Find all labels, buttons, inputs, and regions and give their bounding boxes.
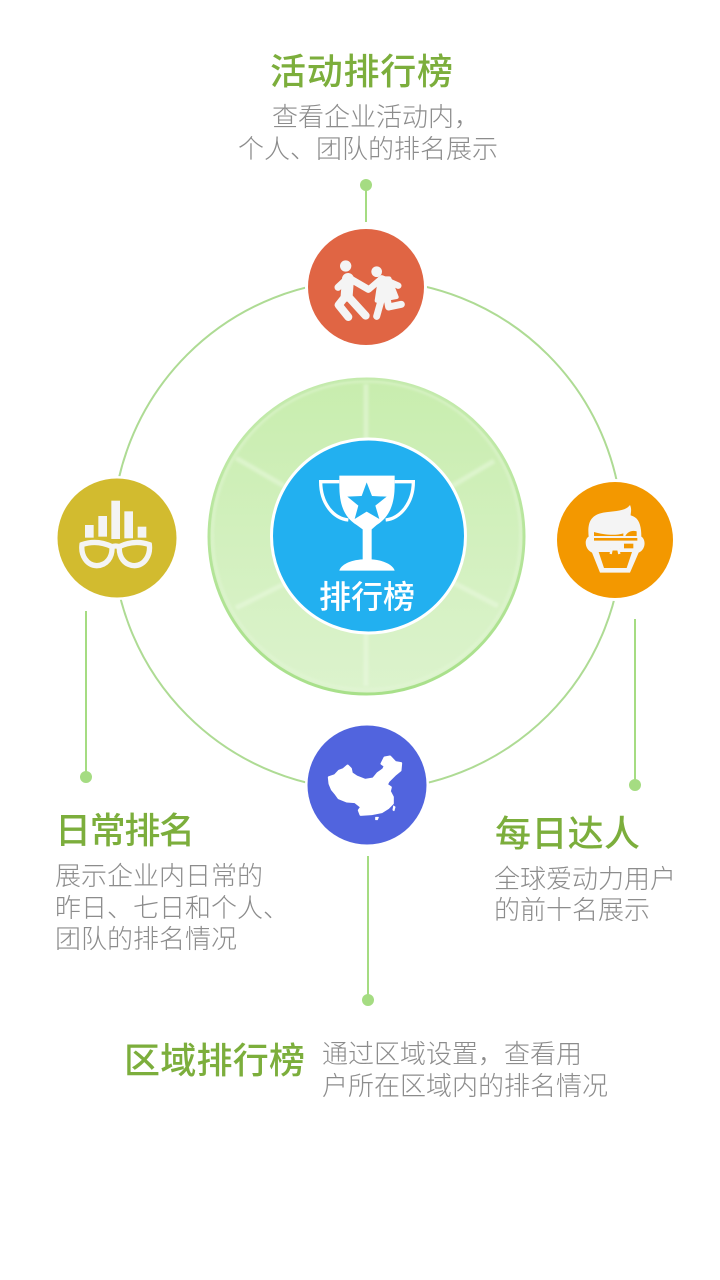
connector: right — [629, 619, 641, 791]
section: daily champion: 每日达人 — [495, 813, 640, 854]
section: daily ranking: 团队的排名情况 — [55, 924, 237, 954]
section: activity ranking: 个人、团队的排名展示 — [238, 134, 498, 164]
section: daily ranking: 昨日、七日和个人、 — [55, 893, 289, 923]
icon: trophy — [321, 476, 413, 571]
icon circle: daily champion — [554, 479, 676, 601]
badge label: 排行榜 — [319, 579, 415, 615]
icon circle: daily ranking — [55, 476, 179, 600]
section: daily ranking: 展示企业内日常的 — [55, 861, 263, 891]
section: regional ranking — [124, 1039, 608, 1101]
section: daily champion — [494, 813, 676, 925]
outer ring — [112, 280, 622, 790]
section: daily champion: 全球爱动力用户 — [494, 864, 676, 894]
section: regional ranking: 区域排行榜 — [124, 1040, 305, 1081]
section: regional ranking: 户所在区域内的排名情况 — [322, 1071, 608, 1101]
section: daily ranking: 日常排名 — [55, 810, 195, 851]
section: activity ranking — [238, 51, 498, 164]
icon circle: regional ranking — [305, 723, 429, 847]
central green disc — [209, 379, 524, 694]
section: daily champion: 的前十名展示 — [494, 895, 650, 925]
central blue badge — [272, 439, 466, 633]
connector: bottom — [362, 856, 374, 1006]
connector: left — [80, 611, 92, 783]
section: activity ranking: 活动排行榜 — [270, 51, 453, 92]
section: activity ranking: 查看企业活动内， — [272, 102, 480, 132]
connector: top — [360, 179, 372, 222]
icon circle: activity ranking — [305, 226, 427, 348]
section: daily ranking — [55, 810, 289, 954]
section: regional ranking: 通过区域设置，查看用 — [322, 1039, 582, 1069]
